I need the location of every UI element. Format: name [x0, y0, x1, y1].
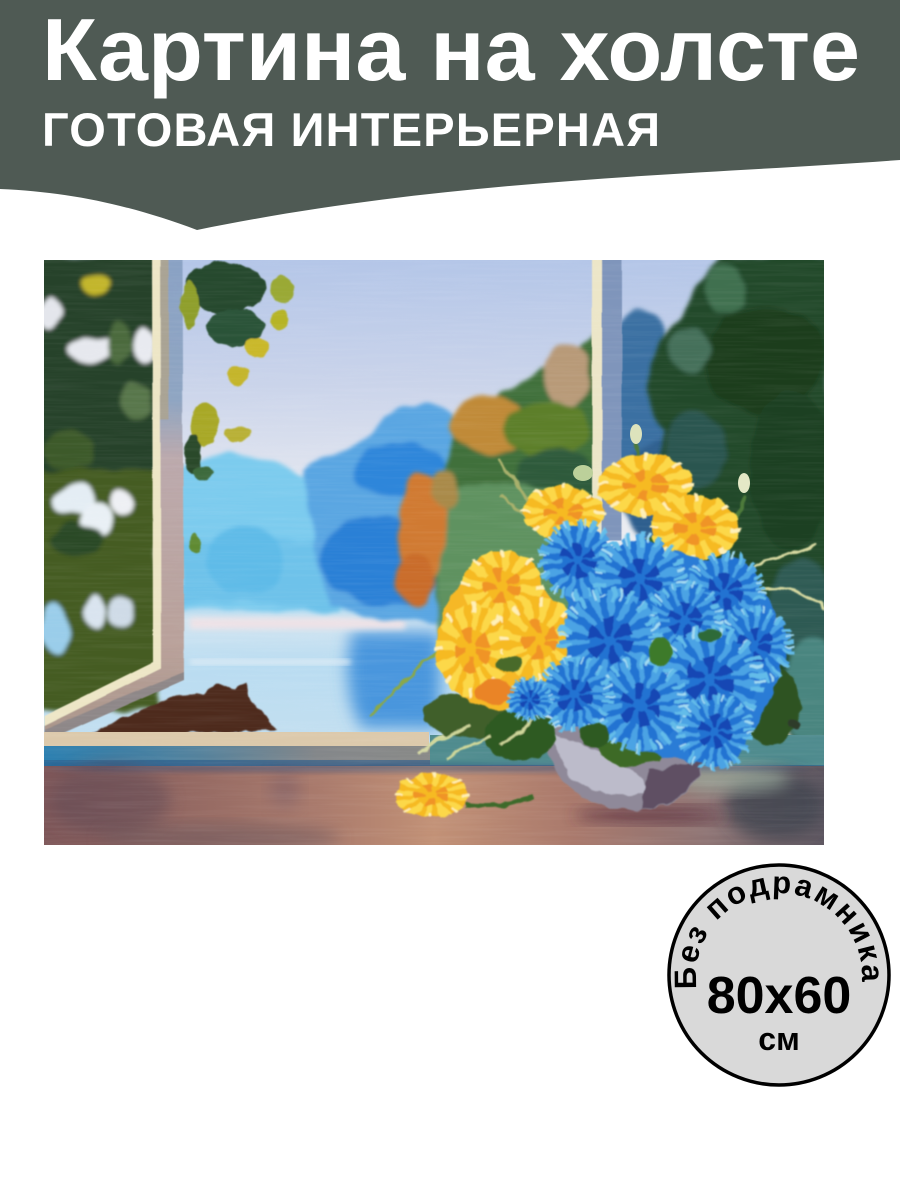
size badge: [667, 863, 891, 1087]
curved label: [696, 893, 862, 989]
mid trees behind the bouquet: [395, 310, 702, 640]
badge circle: [669, 865, 889, 1085]
fallen yellow flower: [396, 773, 532, 817]
size value: 80x60: [707, 967, 851, 1025]
green leaf accents: [496, 629, 721, 747]
yellow flowers: [436, 454, 739, 710]
sky: [68, 260, 763, 546]
window sill: [44, 732, 824, 768]
right window mullion: [592, 255, 622, 540]
flower buds: [573, 424, 750, 493]
right tree mass: [644, 260, 824, 735]
dark bush at the shore: [85, 682, 275, 736]
foliage above the window: [181, 262, 294, 553]
left outer foliage: [36, 255, 158, 710]
header banner: [0, 0, 900, 230]
water and mist: [44, 585, 570, 745]
table top: [44, 764, 825, 852]
stems and grasses: [372, 440, 824, 755]
title: Картина на холсте: [42, 0, 860, 99]
painting: window with bouquet: [36, 255, 838, 852]
canvas brush texture: [44, 260, 824, 845]
blue flowers: [509, 523, 790, 767]
banner background: [0, 0, 900, 230]
vase: [546, 726, 702, 812]
distant blue trees: [180, 403, 470, 621]
size badge: Без подрамника: [674, 876, 879, 988]
subtitle: ГОТОВАЯ ИНТЕРЬЕРНАЯ: [42, 103, 660, 156]
size unit: см: [758, 1021, 800, 1057]
bouquet leaves: [422, 516, 800, 768]
left window frame: [44, 255, 184, 742]
